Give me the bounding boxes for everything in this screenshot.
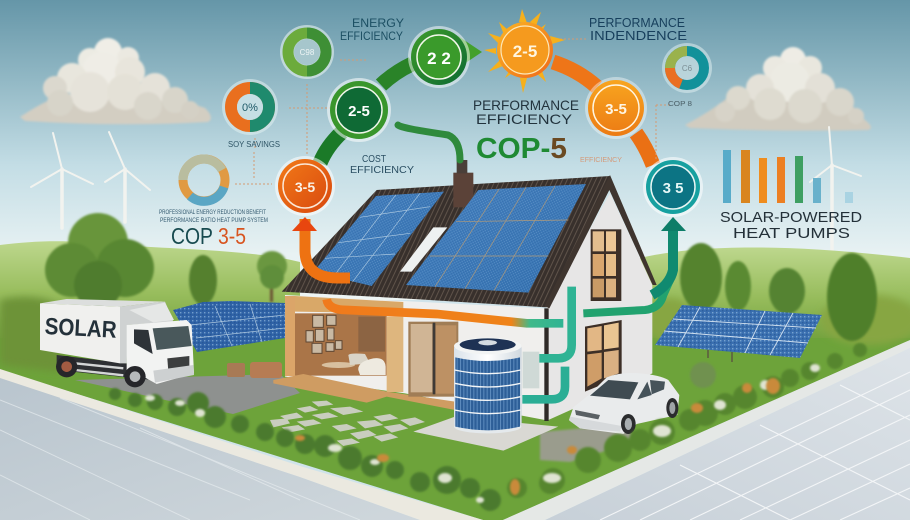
icon: sun badge 2-5: 2-5 (513, 42, 537, 61)
flowers: white (145, 364, 820, 503)
heading: energy efficiency: EFFICIENCY (340, 29, 403, 43)
flowers: orange (295, 378, 780, 495)
label: faded efficiency: EFFICIENCY (580, 157, 622, 164)
heat pump unit (454, 338, 522, 433)
solar array: right (655, 305, 822, 362)
badge: orange 3-5 (275, 156, 335, 216)
teal pipe upper (537, 287, 572, 358)
truck cab (127, 320, 194, 384)
lower window (585, 320, 622, 392)
badge: amber 3-5: 3-5 (605, 101, 627, 118)
heading: performance efficiency: EFFICIENCY (476, 111, 573, 127)
orange to green pipe (327, 299, 563, 323)
sky background (0, 0, 910, 300)
heading: COP 3-5: COP 3-5 (171, 223, 246, 249)
heading: COP-5: COP-5 (476, 133, 567, 165)
solar array: left (173, 301, 285, 352)
wood porch interior (285, 296, 403, 392)
hills (0, 241, 910, 345)
road: left (0, 369, 483, 520)
icon: sun badge 2-5 (484, 9, 565, 93)
badge: green 2-2: 2 2 (427, 49, 451, 68)
stepping stones (270, 401, 425, 446)
green arrow head to sun (448, 36, 482, 68)
trees: left (45, 213, 287, 309)
side gable wall (547, 193, 652, 420)
glass door (408, 322, 458, 397)
truck box (40, 303, 120, 363)
heading: performance independence: INDENDENCE (590, 28, 687, 43)
bar chart (723, 150, 853, 203)
cloud: right (685, 47, 871, 131)
badge: green 2-2 (408, 26, 470, 88)
label: savings: SOY SAVINGS (228, 140, 280, 149)
heading: solar-powered heat pumps: HEAT PUMPS (733, 225, 850, 242)
truck (40, 299, 194, 387)
garden bushes: left border (109, 388, 501, 511)
donut: savings: 0% (242, 102, 258, 114)
lawn (0, 338, 910, 520)
truck chassis (57, 355, 153, 380)
caption: left small text (159, 210, 268, 224)
control box (523, 352, 539, 388)
cloud: left (20, 38, 211, 124)
solar panel: left roof (313, 192, 444, 286)
heading: solar-powered heat pumps (720, 209, 862, 242)
planters (227, 362, 282, 378)
front wall (285, 295, 545, 420)
skylight (400, 227, 447, 272)
green chimney pipe (398, 125, 460, 160)
car (569, 373, 679, 434)
heading: performance independence (589, 15, 687, 43)
badge: teal 3-5: 3 5 (663, 180, 683, 197)
green arc: upper segment (381, 64, 412, 85)
badge: green 2-5: 2-5 (348, 103, 370, 120)
driveway (75, 374, 300, 414)
upper window (591, 229, 621, 301)
donut: left (183, 159, 225, 201)
hedge right behind array (646, 295, 910, 345)
orange arc: sun to middle (553, 62, 597, 87)
donut: right: C6 (682, 64, 693, 73)
wind turbine: left 1 (31, 133, 93, 228)
hedge left behind truck (0, 297, 70, 372)
badge: teal 3-5 (643, 157, 703, 217)
roof (282, 175, 657, 308)
heading: cost efficiency: EFFICIENCY (350, 165, 414, 176)
truck wheels (56, 356, 77, 377)
trees: right (680, 243, 877, 341)
dotted leader lines (235, 39, 670, 184)
caption: left small text: PERFORMANCE RATIO HEAT PUMP SYSTEM (160, 218, 268, 224)
donut: savings (222, 79, 278, 135)
house (270, 160, 670, 451)
heading: performance efficiency: PERFORMANCE (473, 97, 579, 113)
donut: right (662, 43, 712, 93)
orange arc: middle to teal (636, 133, 653, 165)
heading: performance independence: PERFORMANCE (589, 15, 685, 30)
label: COP 8: COP 8 (668, 101, 692, 108)
heading: performance efficiency (473, 97, 579, 127)
truck label: SOLAR (44, 314, 117, 344)
upper wood fascia (295, 296, 403, 313)
donut: top green (280, 25, 334, 79)
badge: orange 3-5: 3-5 (295, 179, 315, 195)
road: right (503, 340, 910, 520)
green pipe right (583, 280, 670, 313)
chimney (453, 160, 473, 207)
caption: left small text: PROFESSIONAL ENERGY REDUCTION BENEFIT (159, 210, 266, 216)
solar panel: main roof (406, 184, 586, 293)
round bush beside car (690, 362, 716, 388)
heading: energy efficiency (340, 16, 404, 43)
orange up arrow and pipe (292, 217, 350, 278)
wind turbine: left 2 (105, 132, 150, 222)
heading: cost efficiency: COST (362, 154, 386, 165)
heading: cost efficiency (350, 154, 414, 176)
donut: top green: C98 (300, 48, 315, 57)
badge: green 2-5 (327, 78, 391, 142)
badge: amber 3-5 (585, 77, 647, 139)
wind turbine: right (810, 127, 861, 265)
teal pipe lower (522, 367, 565, 399)
car apron ground (540, 425, 640, 462)
concrete slab (413, 417, 558, 451)
heading: energy efficiency: ENERGY (352, 16, 404, 30)
dark corner post (544, 308, 549, 421)
heading: solar-powered heat pumps: SOLAR-POWERED (720, 209, 862, 226)
deck (273, 374, 455, 410)
garden bushes: right border (507, 343, 867, 498)
green arc: lower segment (320, 132, 342, 163)
teal up arrow and pipe (652, 217, 686, 295)
